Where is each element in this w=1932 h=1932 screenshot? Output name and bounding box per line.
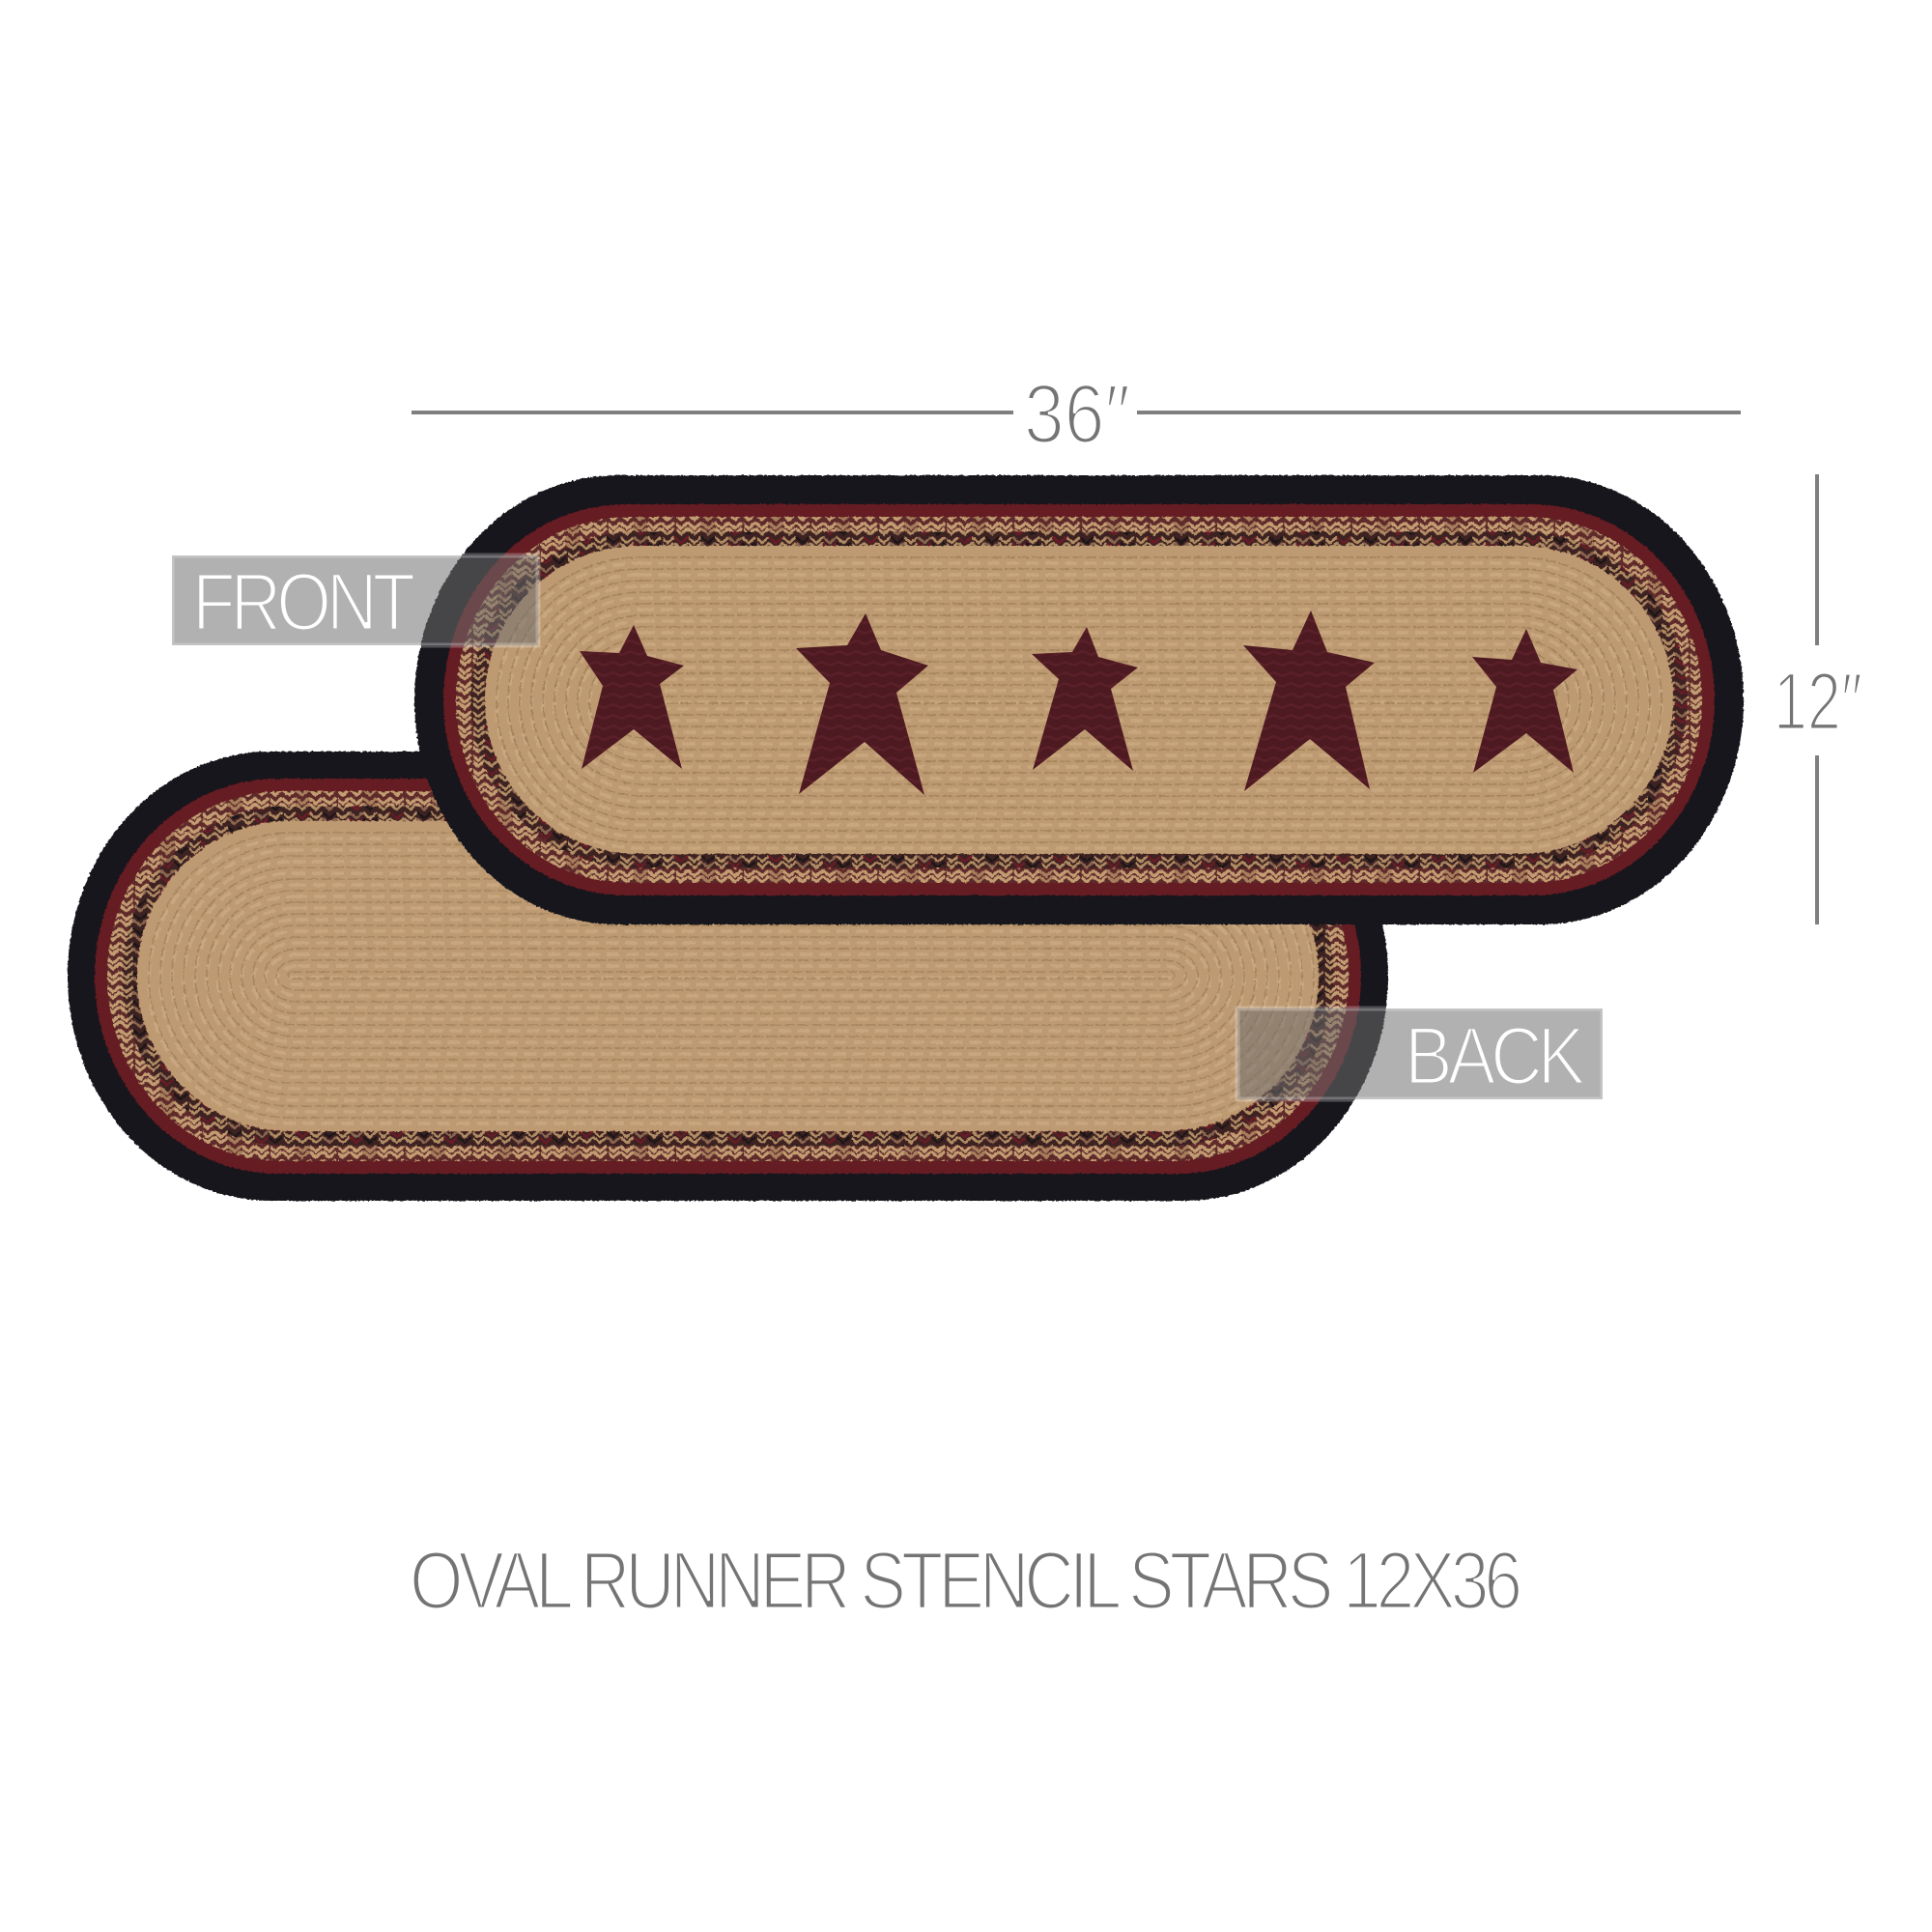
dimension: width 36 inches: [412, 368, 1741, 461]
star 5: [1472, 629, 1577, 773]
back rug braid rings: [149, 833, 1314, 1123]
front rug braided band: [456, 517, 1702, 883]
back rug burgundy band: [95, 779, 1361, 1174]
front rug burgundy band: [443, 504, 1715, 895]
star 2: [796, 613, 928, 795]
back rug braided band dark inner row: [129, 813, 1326, 1139]
front rug black outer border: [414, 475, 1744, 924]
back rug black outer border: [68, 752, 1388, 1201]
front rug woven body: [414, 475, 1744, 924]
label: BACK: [1237, 1009, 1603, 1101]
label box front: [172, 555, 538, 645]
star 4: [1243, 611, 1375, 791]
dimension text 36: 36″: [1024, 368, 1130, 461]
label box back: [1237, 1009, 1603, 1099]
dimension text 12: 12″: [1774, 656, 1862, 747]
star 3: [1032, 627, 1138, 771]
front rug braided band dark inner row: [478, 539, 1680, 861]
dimension line top: [1815, 474, 1819, 645]
title caption: OVAL RUNNER STENCIL STARS 12X36: [410, 1535, 1520, 1626]
star 1: [580, 625, 684, 769]
dimension: height 12 inches: [1774, 474, 1862, 924]
panel: front of rug: [414, 475, 1744, 924]
front rug tan centre: [485, 546, 1673, 854]
label text back: BACK: [1405, 1010, 1585, 1101]
label: FRONT: [172, 555, 538, 647]
label text front: FRONT: [192, 556, 414, 647]
dimension line right: [1137, 411, 1741, 414]
back rug tan centre: [137, 821, 1319, 1131]
front rug braid rings: [497, 557, 1662, 848]
back rug braided band: [107, 791, 1349, 1161]
panel: back of rug: [68, 752, 1388, 1201]
dimension line bottom: [1815, 755, 1819, 924]
dimension line left: [412, 411, 1013, 414]
